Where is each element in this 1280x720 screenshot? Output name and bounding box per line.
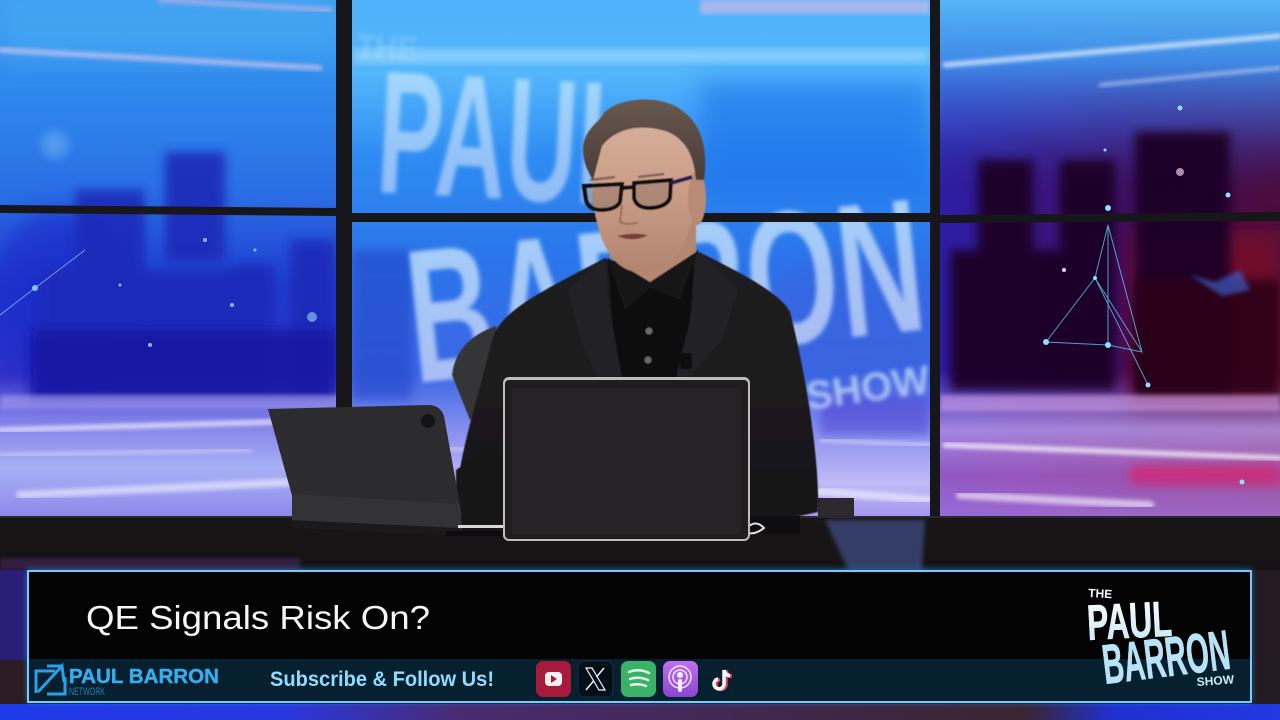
neck — [606, 214, 696, 282]
lower-third banner — [0, 569, 1280, 720]
subscribe call to action: Subscribe & Follow Us! — [270, 668, 494, 691]
right screen panel — [935, 0, 1280, 520]
icon: YouTube — [536, 661, 571, 697]
network logo — [36, 666, 219, 698]
network logo: NETWORK — [69, 686, 105, 698]
background show logo on the screen: THE — [356, 28, 419, 69]
icon: TikTok — [714, 670, 732, 689]
reflections beside the banner — [0, 570, 27, 660]
icon: glowing wire pyramid — [1046, 225, 1148, 385]
head — [583, 99, 706, 272]
show logo: SHOW — [1196, 672, 1235, 689]
laptop — [503, 377, 750, 541]
center screen panel — [345, 0, 960, 520]
network logo: PAUL BARRON — [69, 666, 219, 688]
show logo: THE — [1088, 586, 1113, 601]
black polo shirt — [608, 248, 695, 378]
desk — [0, 498, 1280, 706]
show logo: BARRON — [1099, 620, 1233, 696]
icon: Spotify — [621, 661, 656, 697]
studio video wall background — [0, 0, 1280, 516]
show logo — [1086, 586, 1235, 696]
slicked-back hair — [583, 99, 705, 180]
icon: X — [578, 661, 613, 697]
black screen frame bars — [0, 0, 1280, 520]
background show logo on the screen — [356, 28, 933, 424]
background show logo on the screen: BARRON — [397, 159, 933, 424]
background show logo on the screen: PAUL — [373, 36, 642, 244]
black jacket and torso — [456, 250, 818, 520]
desk accessories — [446, 516, 800, 536]
background show logo on the screen: SHOW — [803, 358, 933, 419]
mesh office chair — [452, 326, 504, 420]
icon: Apple Podcasts — [663, 661, 698, 697]
eyeglasses — [584, 177, 692, 210]
tablet with keyboard case — [268, 405, 462, 536]
lapel microphone — [680, 353, 692, 369]
left screen panel — [0, 0, 345, 520]
eyebrows, nose, mouth — [590, 174, 664, 180]
presenter — [452, 99, 818, 520]
headline: QE Signals Risk On? — [86, 599, 430, 636]
social bar — [29, 659, 1250, 701]
show logo: PAUL — [1086, 590, 1173, 651]
hands/sleeves at desk — [456, 440, 510, 520]
